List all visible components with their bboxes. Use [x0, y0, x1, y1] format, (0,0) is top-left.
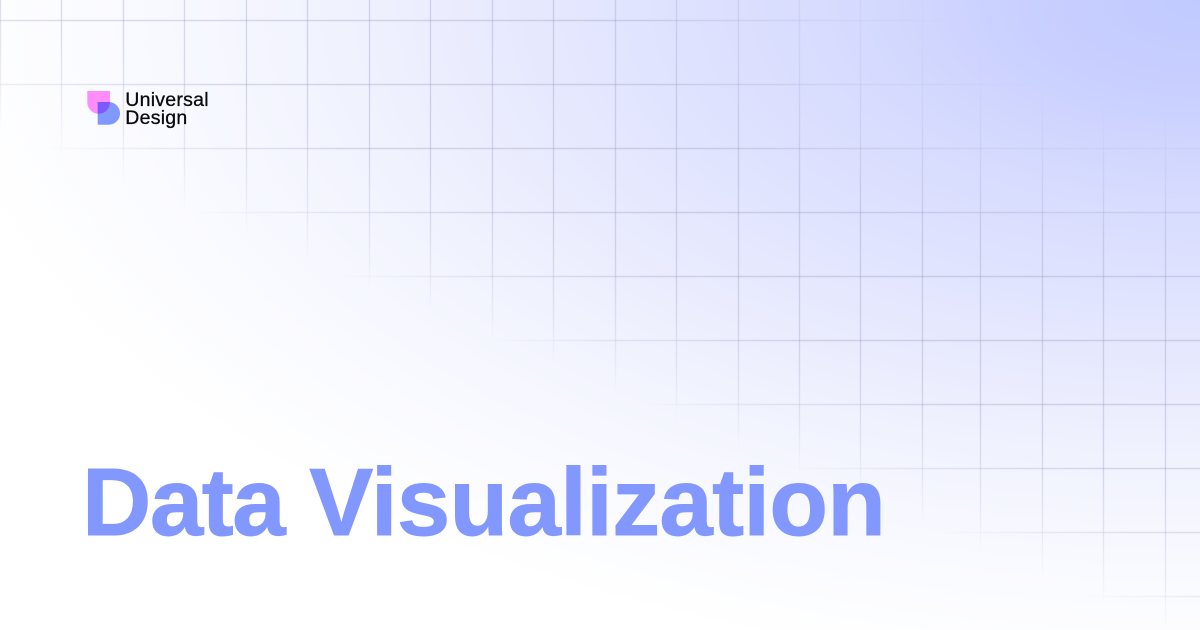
wordmark: [125, 88, 209, 129]
logo: [87, 88, 209, 129]
title: Data Visualization: [82, 449, 885, 556]
wordmark: Design: [125, 107, 188, 129]
icon: overlapping logo mark: [87, 91, 120, 125]
wordmark: Universal: [125, 88, 209, 110]
